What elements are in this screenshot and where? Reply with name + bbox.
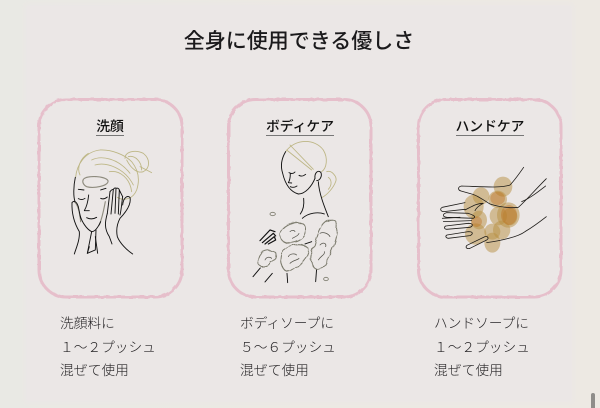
instructions: body care: ボディソープに [240,316,334,331]
illustration: hands with lather [441,167,546,253]
instructions: body care: 混ぜて使用 [240,363,309,378]
scrollbar tick [591,393,595,408]
instructions: body care: ５～６プッシュ [240,340,336,355]
panel frame: face wash [39,100,182,297]
label: hand care: ハンドケア [456,119,524,134]
label: face wash: 洗顔 [96,119,124,134]
illustration: woman washing face [72,150,152,254]
instructions: hand care: ハンドソープに [434,316,529,331]
instructions: face wash: １～２プッシュ [60,340,156,355]
instructions: face wash: 混ぜて使用 [60,363,129,378]
instructions: face wash [60,316,156,378]
instructions: face wash: 洗顔料に [60,316,115,331]
instructions: hand care: 混ぜて使用 [434,363,503,378]
foam on forehead and cheeks [74,177,108,225]
instructions: hand care [434,316,530,378]
illustration: woman washing body [253,141,338,283]
foam clusters [258,219,338,272]
label: body care: ボディケア [266,119,334,134]
panel frame: body care [228,100,371,297]
title: 全身に使用できる優しさ [184,30,414,53]
instructions: hand care: １～２プッシュ [434,340,530,355]
instructions: body care [240,316,336,378]
panel frame: hand care [418,100,561,297]
